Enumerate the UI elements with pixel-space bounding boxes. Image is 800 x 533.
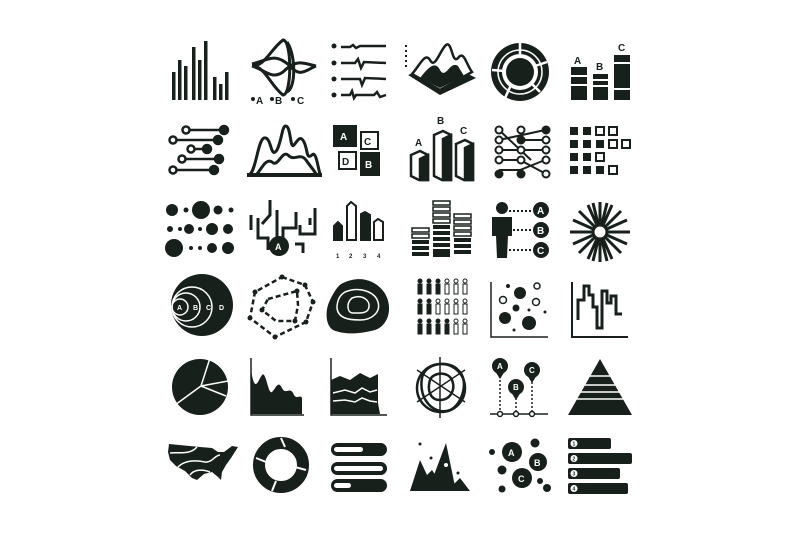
- icon: circuit A: [251, 200, 315, 256]
- icon: nested circles ABCD: D: [219, 305, 224, 312]
- icon: mountain peaks: [410, 442, 470, 491]
- icon: radar spiro: [417, 357, 465, 418]
- icon: ABCD squares: D: [342, 157, 349, 168]
- icon: ABCD squares: [333, 125, 380, 176]
- icon: scatter plot: [491, 282, 548, 337]
- icon: step line chart: [572, 282, 628, 337]
- icon: wave ABC: C: [297, 96, 304, 107]
- icon: arrow bars 1234: 4: [377, 254, 381, 260]
- icon: numbered bars: 2: [572, 456, 576, 462]
- icon: donut chart: [491, 43, 549, 101]
- icon: nested circles ABCD: A: [177, 305, 182, 312]
- icon: pin markers ABC: A: [497, 362, 503, 371]
- icon: nested circles ABCD: C: [206, 305, 211, 312]
- icon: person ABC: C: [537, 246, 544, 257]
- icon: bar chart: [172, 41, 228, 100]
- icon: ABC bars: [571, 43, 630, 100]
- icon: square grid: [570, 127, 630, 174]
- icon: numbered bars: [568, 438, 632, 494]
- icon: bubbles ABC: A: [508, 448, 515, 458]
- icon: line signals: [332, 44, 386, 98]
- icon: ABC bars: B: [596, 62, 603, 73]
- icon: person ABC: B: [537, 226, 544, 237]
- icon: numbered bars: 1: [572, 442, 576, 448]
- icon: pin markers ABC: C: [529, 366, 535, 375]
- icon: pie chart: [172, 358, 228, 415]
- icon: 3D bars ABC: A: [415, 138, 422, 149]
- icon: person ABC: A: [537, 206, 544, 217]
- icon: nested circles ABCD: B: [193, 305, 198, 312]
- icon: numbered bars: 3: [572, 472, 576, 478]
- icon: ABC bars: A: [574, 56, 581, 67]
- icon: ABCD squares: A: [340, 132, 347, 143]
- icon: connected dots lines: [170, 126, 228, 174]
- icon: contour blob: [327, 279, 389, 333]
- icon: 3D bars ABC: C: [460, 126, 467, 137]
- icon: pin markers ABC: [490, 358, 548, 416]
- icon: wave ABC: A: [256, 96, 263, 107]
- icon: ABCD squares: C: [364, 137, 371, 148]
- icon: pyramid: [568, 359, 632, 415]
- icon: nested circles ABCD: [171, 274, 233, 336]
- icon: polygon network: [248, 274, 316, 340]
- icon: circuit A: A: [275, 242, 282, 252]
- icon: area chart: [251, 358, 304, 415]
- icon: 3D bars ABC: [411, 116, 473, 180]
- icon: ABCD squares: B: [365, 160, 372, 171]
- icon: person ABC: [492, 202, 549, 258]
- icon: arrow bars 1234: [334, 202, 383, 260]
- icon: bubbles ABC: B: [534, 458, 541, 468]
- icon: equalizer: [412, 201, 471, 257]
- icon: progress bars: [331, 443, 387, 492]
- icon: cycle ring: [256, 438, 306, 491]
- icon: arrow bars 1234: 3: [363, 254, 367, 260]
- icon: arrow bars 1234: 1: [336, 254, 340, 260]
- icon: pin markers ABC: B: [513, 383, 519, 392]
- icon: wave ABC: [251, 40, 316, 107]
- icon: sunburst: [570, 202, 630, 262]
- icon: wave ABC: B: [275, 96, 282, 107]
- icon: 3D mountain: [406, 44, 476, 95]
- icon: ABC bars: C: [618, 43, 625, 54]
- icon: USA map: [168, 444, 238, 480]
- icon: bubbles ABC: [489, 438, 551, 492]
- icon: 3D bars ABC: B: [437, 116, 444, 127]
- icon: bubbles ABC: C: [518, 474, 525, 484]
- icon: network crossing lines: [496, 126, 550, 178]
- icon: people grid: [418, 279, 467, 334]
- icon: mountain outline chart: [247, 126, 322, 175]
- icon: arrow bars 1234: 2: [349, 254, 353, 260]
- icon: stacked area chart: [331, 358, 387, 415]
- icon: numbered bars: 4: [572, 486, 576, 492]
- icon: dot matrix: [165, 201, 234, 257]
